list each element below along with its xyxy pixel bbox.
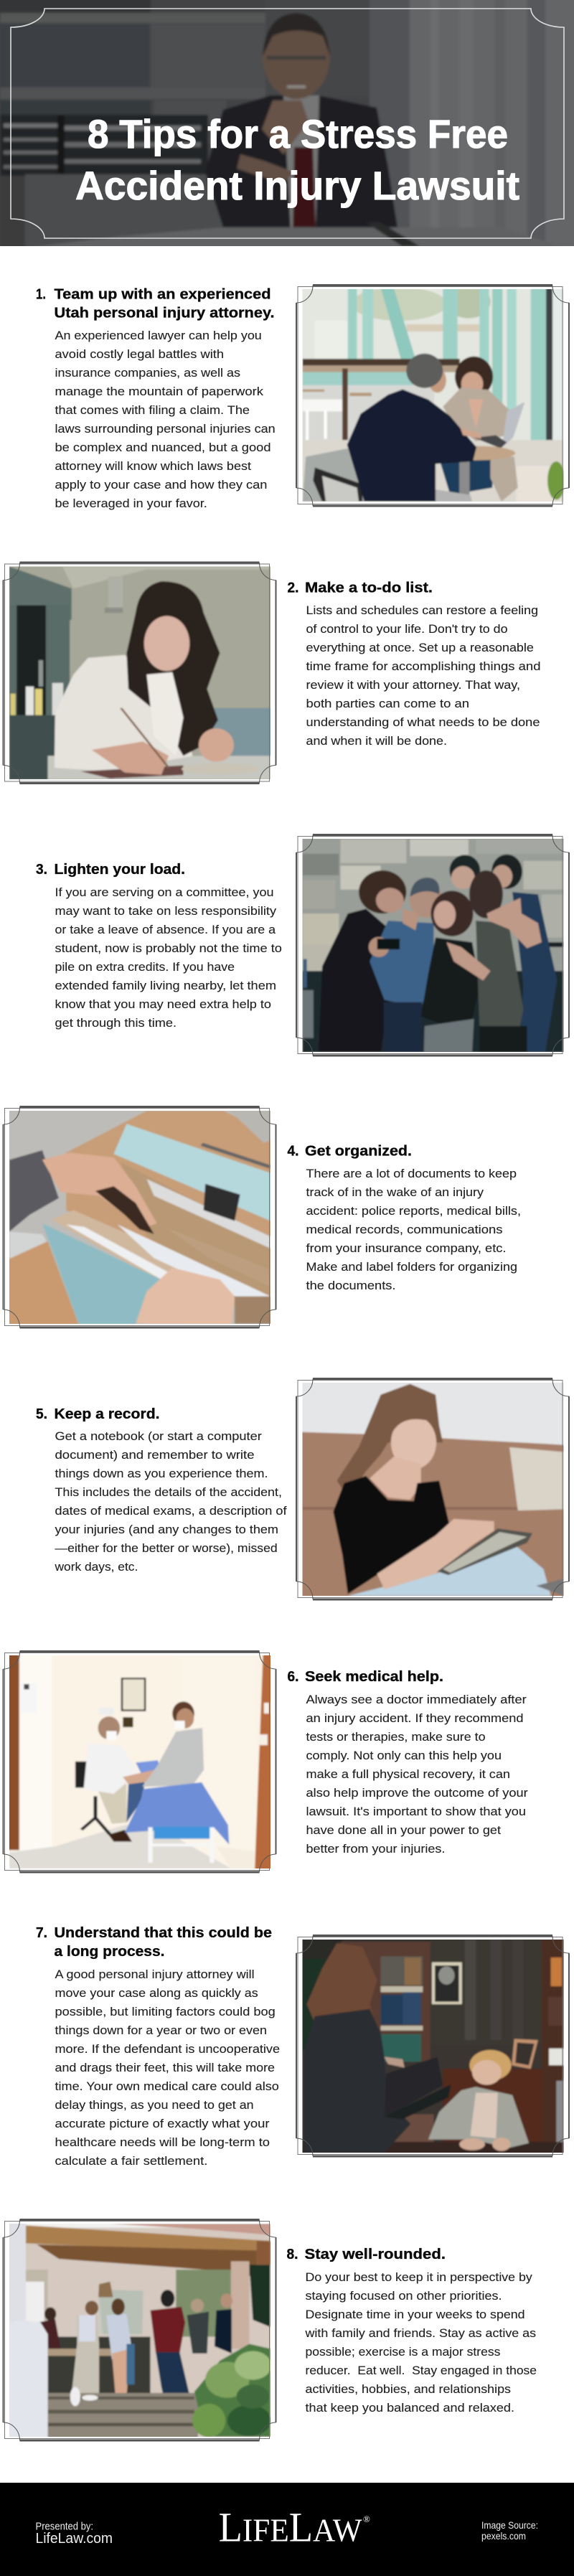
image source credit: Image Source: — [481, 2519, 538, 2531]
tip 1 body text: laws surrounding personal injuries can — [55, 422, 276, 436]
header banner — [0, 0, 574, 255]
tip 2 body text: both parties can come to an — [306, 697, 469, 710]
tip 3 heading: Lighten your load. — [55, 862, 185, 878]
image source credit: pexels.com — [481, 2530, 526, 2542]
tip 8 body text: possible; exercise is a major stress — [306, 2345, 500, 2359]
tip 8 body text: that keep you balanced and relaxed. — [306, 2401, 514, 2415]
tip 6 body text: comply. Not only can this help you — [306, 1749, 502, 1762]
tip 4 heading: 4. — [287, 1144, 298, 1160]
tip 1 body text: manage the mountain of paperwork — [55, 385, 264, 398]
header ornamental frame — [11, 9, 564, 238]
tip 8 heading: Stay well-rounded. — [304, 2247, 446, 2262]
tip 6 body text: tests or therapies, make sure to — [306, 1730, 485, 1744]
tip 1 body text: An experienced lawyer can help you — [55, 329, 262, 342]
tip 7 body text: accurate picture of exactly what your — [55, 2117, 270, 2130]
tip 8 body text: Do your best to keep it in perspective by — [306, 2270, 532, 2284]
tip 8 body text: staying focused on other priorities. — [306, 2289, 502, 2303]
tip 8 heading: 8. — [287, 2247, 298, 2262]
tip 1 body text: avoid costly legal battles with — [55, 347, 224, 361]
title — [75, 111, 519, 208]
tip 5 body text — [54, 1429, 287, 1574]
tip 5 body text: This includes the details of the accident, — [55, 1485, 282, 1499]
tip 4 heading: Get organized. — [305, 1144, 412, 1160]
tip 4 body text: the documents. — [306, 1279, 396, 1292]
LifeLaw logo: LIFELAW — [219, 2504, 362, 2550]
tip 6 panel — [0, 1647, 528, 1875]
tip 2 photo: woman writing a list — [9, 567, 270, 779]
tip 3 body text: get through this time. — [55, 1016, 177, 1030]
tip 7 heading: Understand that this could be — [55, 1925, 272, 1941]
tip 3 body text: extended family living nearby, let them — [55, 979, 276, 992]
tip 3 body text: If you are serving on a committee, you — [55, 885, 274, 899]
tip 4 body text: Make and label folders for organizing — [306, 1260, 517, 1274]
tip 2 body text: everything at once. Set up a reasonable — [306, 641, 534, 654]
tip 5 body text: —either for the better or worse), missed — [55, 1541, 278, 1555]
tip 6 heading: Seek medical help. — [305, 1669, 443, 1685]
tip 1 body text: insurance companies, as well as — [55, 366, 240, 380]
tip 3 body text: pile on extra credits. If you have — [55, 960, 235, 974]
tip 1 body text: be complex and nuanced, but a good — [55, 441, 271, 454]
tip 7 body text: and drags their feet, this will take more — [55, 2061, 275, 2074]
tip 4 panel — [0, 1105, 521, 1330]
tip 1 body text: apply to your case and how they can — [55, 478, 267, 492]
tip 8 panel — [0, 2217, 537, 2445]
tip 2 body text: and when it will be done. — [306, 734, 447, 748]
tip 7 body text: time. Your own medical care could also — [55, 2079, 279, 2093]
tip 4 body text: from your insurance company, etc. — [306, 1241, 507, 1255]
tip 5 body text: Get a notebook (or start a computer — [55, 1429, 262, 1443]
tip 2 panel — [0, 560, 541, 784]
title: 8 Tips for a Stress Free — [88, 111, 508, 156]
tip 5 body text: work days, etc. — [54, 1560, 138, 1574]
footer band — [0, 2483, 574, 2576]
tip 7 body text: healthcare needs will be long-term to — [55, 2135, 270, 2149]
tip 2 body text — [306, 603, 541, 748]
tip 8 photo: friends gathering on a patio — [9, 2224, 270, 2437]
tip 5 photo frame — [296, 1379, 569, 1599]
tip 2 body text: understanding of what needs to be done — [306, 715, 540, 729]
tip 7 body text: things down for a year or two or even — [55, 2023, 267, 2037]
tip 6 body text: make a full physical recovery, it can — [306, 1767, 510, 1781]
tip 6 body text: also help improve the outcome of your — [306, 1786, 528, 1800]
tip 7 body text — [55, 1968, 280, 2168]
tip 6 body text: better from your injuries. — [306, 1842, 445, 1856]
tip 1 panel — [36, 283, 571, 510]
tip 6 body text — [306, 1693, 528, 1856]
tip 4 photo: hands sorting document folders — [9, 1111, 270, 1324]
tip 1 body text — [55, 329, 276, 510]
tip 8 body text: activities, hobbies, and relationships — [306, 2382, 511, 2396]
tip 1 photo: client and attorney in cafe — [303, 289, 564, 502]
presented by credit: LifeLaw.com — [36, 2531, 113, 2547]
tip 8 body text: with family and friends. Stay as active as — [304, 2326, 536, 2340]
tip 6 heading: 6. — [287, 1669, 298, 1685]
tip 3 body text: or take a leave of absence. If you are a — [55, 923, 276, 936]
tip 3 body text: know that you may need extra help to — [55, 997, 271, 1011]
tip 7 photo: two women in a law office — [303, 1940, 564, 2153]
tip 2 body text: of control to your life. Don't try to do — [306, 622, 508, 636]
tip 6 body text: an injury accident. If they recommend — [306, 1711, 524, 1725]
tip 4 body text — [306, 1167, 521, 1292]
tip 3 panel — [36, 832, 571, 1057]
tip 5 body text: things down as you experience them. — [55, 1467, 268, 1480]
tip 1 heading: Utah personal injury attorney. — [55, 306, 274, 321]
tip 5 body text: dates of medical exams, a description of — [55, 1504, 287, 1518]
tip 7 heading — [36, 1925, 272, 1960]
tip 8 body text: Designate time in your weeks to spend — [306, 2308, 525, 2321]
tip 3 body text: may want to take on less responsibility — [55, 904, 277, 918]
header photo: smiling lawyer at desk — [0, 0, 574, 246]
tip 4 body text: accident: police reports, medical bills, — [306, 1204, 521, 1218]
tip 4 body text: track of in the wake of an injury — [306, 1185, 484, 1199]
tip 1 photo frame — [296, 286, 569, 506]
tip 7 photo frame — [296, 1936, 569, 2156]
tip 7 body text: calculate a fair settlement. — [55, 2154, 207, 2168]
LifeLaw logo: ® — [363, 2514, 370, 2524]
tip 6 photo frame — [3, 1652, 276, 1872]
tip 1 heading — [36, 287, 274, 321]
tip 2 body text: time frame for accomplishing things and — [306, 659, 541, 673]
tip 8 body text — [304, 2270, 537, 2415]
tip 6 body text: lawsuit. It's important to show that you — [306, 1805, 526, 1818]
tip 3 body text: student, now is probably not the time to — [55, 941, 282, 955]
tip 6 body text: Always see a doctor immediately after — [306, 1693, 527, 1706]
tip 1 body text: be leveraged in your favor. — [55, 497, 207, 510]
presented by credit: Presented by: — [36, 2520, 93, 2533]
tip 1 body text: that comes with filing a claim. The — [55, 403, 250, 417]
tip 2 body text: Lists and schedules can restore a feeling — [306, 603, 538, 617]
tip 6 body text: have done all in your power to get — [306, 1823, 501, 1837]
tip 7 body text: A good personal injury attorney will — [55, 1968, 255, 1981]
tip 2 heading: 2. — [287, 580, 298, 596]
tip 7 heading: a long process. — [55, 1944, 165, 1960]
tip 7 body text: delay things, as you need to get an — [55, 2098, 254, 2112]
tip 8 photo frame — [3, 2220, 276, 2440]
tip 7 body text: possible, but limiting factors could bog — [55, 2005, 276, 2018]
tip 5 body text: your injuries (and any changes to them — [55, 1523, 278, 1536]
tip 1 heading: 1. — [36, 287, 46, 303]
tip 5 heading: 5. — [36, 1406, 47, 1422]
tip 2 heading: Make a to-do list. — [305, 580, 433, 596]
tip 3 photo frame — [296, 835, 569, 1056]
tip 2 body text: review it with your attorney. That way, — [306, 678, 520, 692]
tip 2 photo frame — [3, 563, 276, 784]
tip 4 body text: There are a lot of documents to keep — [306, 1167, 517, 1180]
title: Accident Injury Lawsuit — [75, 163, 519, 208]
tip 7 body text: move your case along as quickly as — [55, 1986, 258, 2000]
tip 5 body text: document) and remember to write — [55, 1448, 254, 1462]
presented by credit — [36, 2520, 113, 2547]
tip 3 body text — [55, 885, 282, 1030]
tip 5 photo: woman taking notes on a sofa — [303, 1383, 564, 1596]
tip 5 heading: Keep a record. — [55, 1406, 159, 1422]
tip 1 heading: Team up with an experienced — [55, 287, 271, 303]
tip 3 heading: 3. — [36, 862, 47, 878]
tip 3 photo: family taking a selfie — [303, 839, 564, 1052]
tip 7 panel — [36, 1925, 571, 2168]
tip 6 photo: doctor examining a patient — [9, 1655, 270, 1868]
tip 5 panel — [36, 1376, 571, 1602]
tip 8 body text: reducer. Eat well. Stay engaged in those — [306, 2364, 537, 2377]
tip 4 body text: medical records, communications — [306, 1223, 502, 1236]
tip 7 heading: 7. — [36, 1925, 47, 1941]
image source credit — [481, 2519, 538, 2542]
tip 7 body text: more. If the defendant is uncooperative — [55, 2042, 280, 2056]
tip 4 photo frame — [3, 1106, 276, 1327]
tip 1 body text: attorney will know which laws best — [55, 459, 251, 473]
